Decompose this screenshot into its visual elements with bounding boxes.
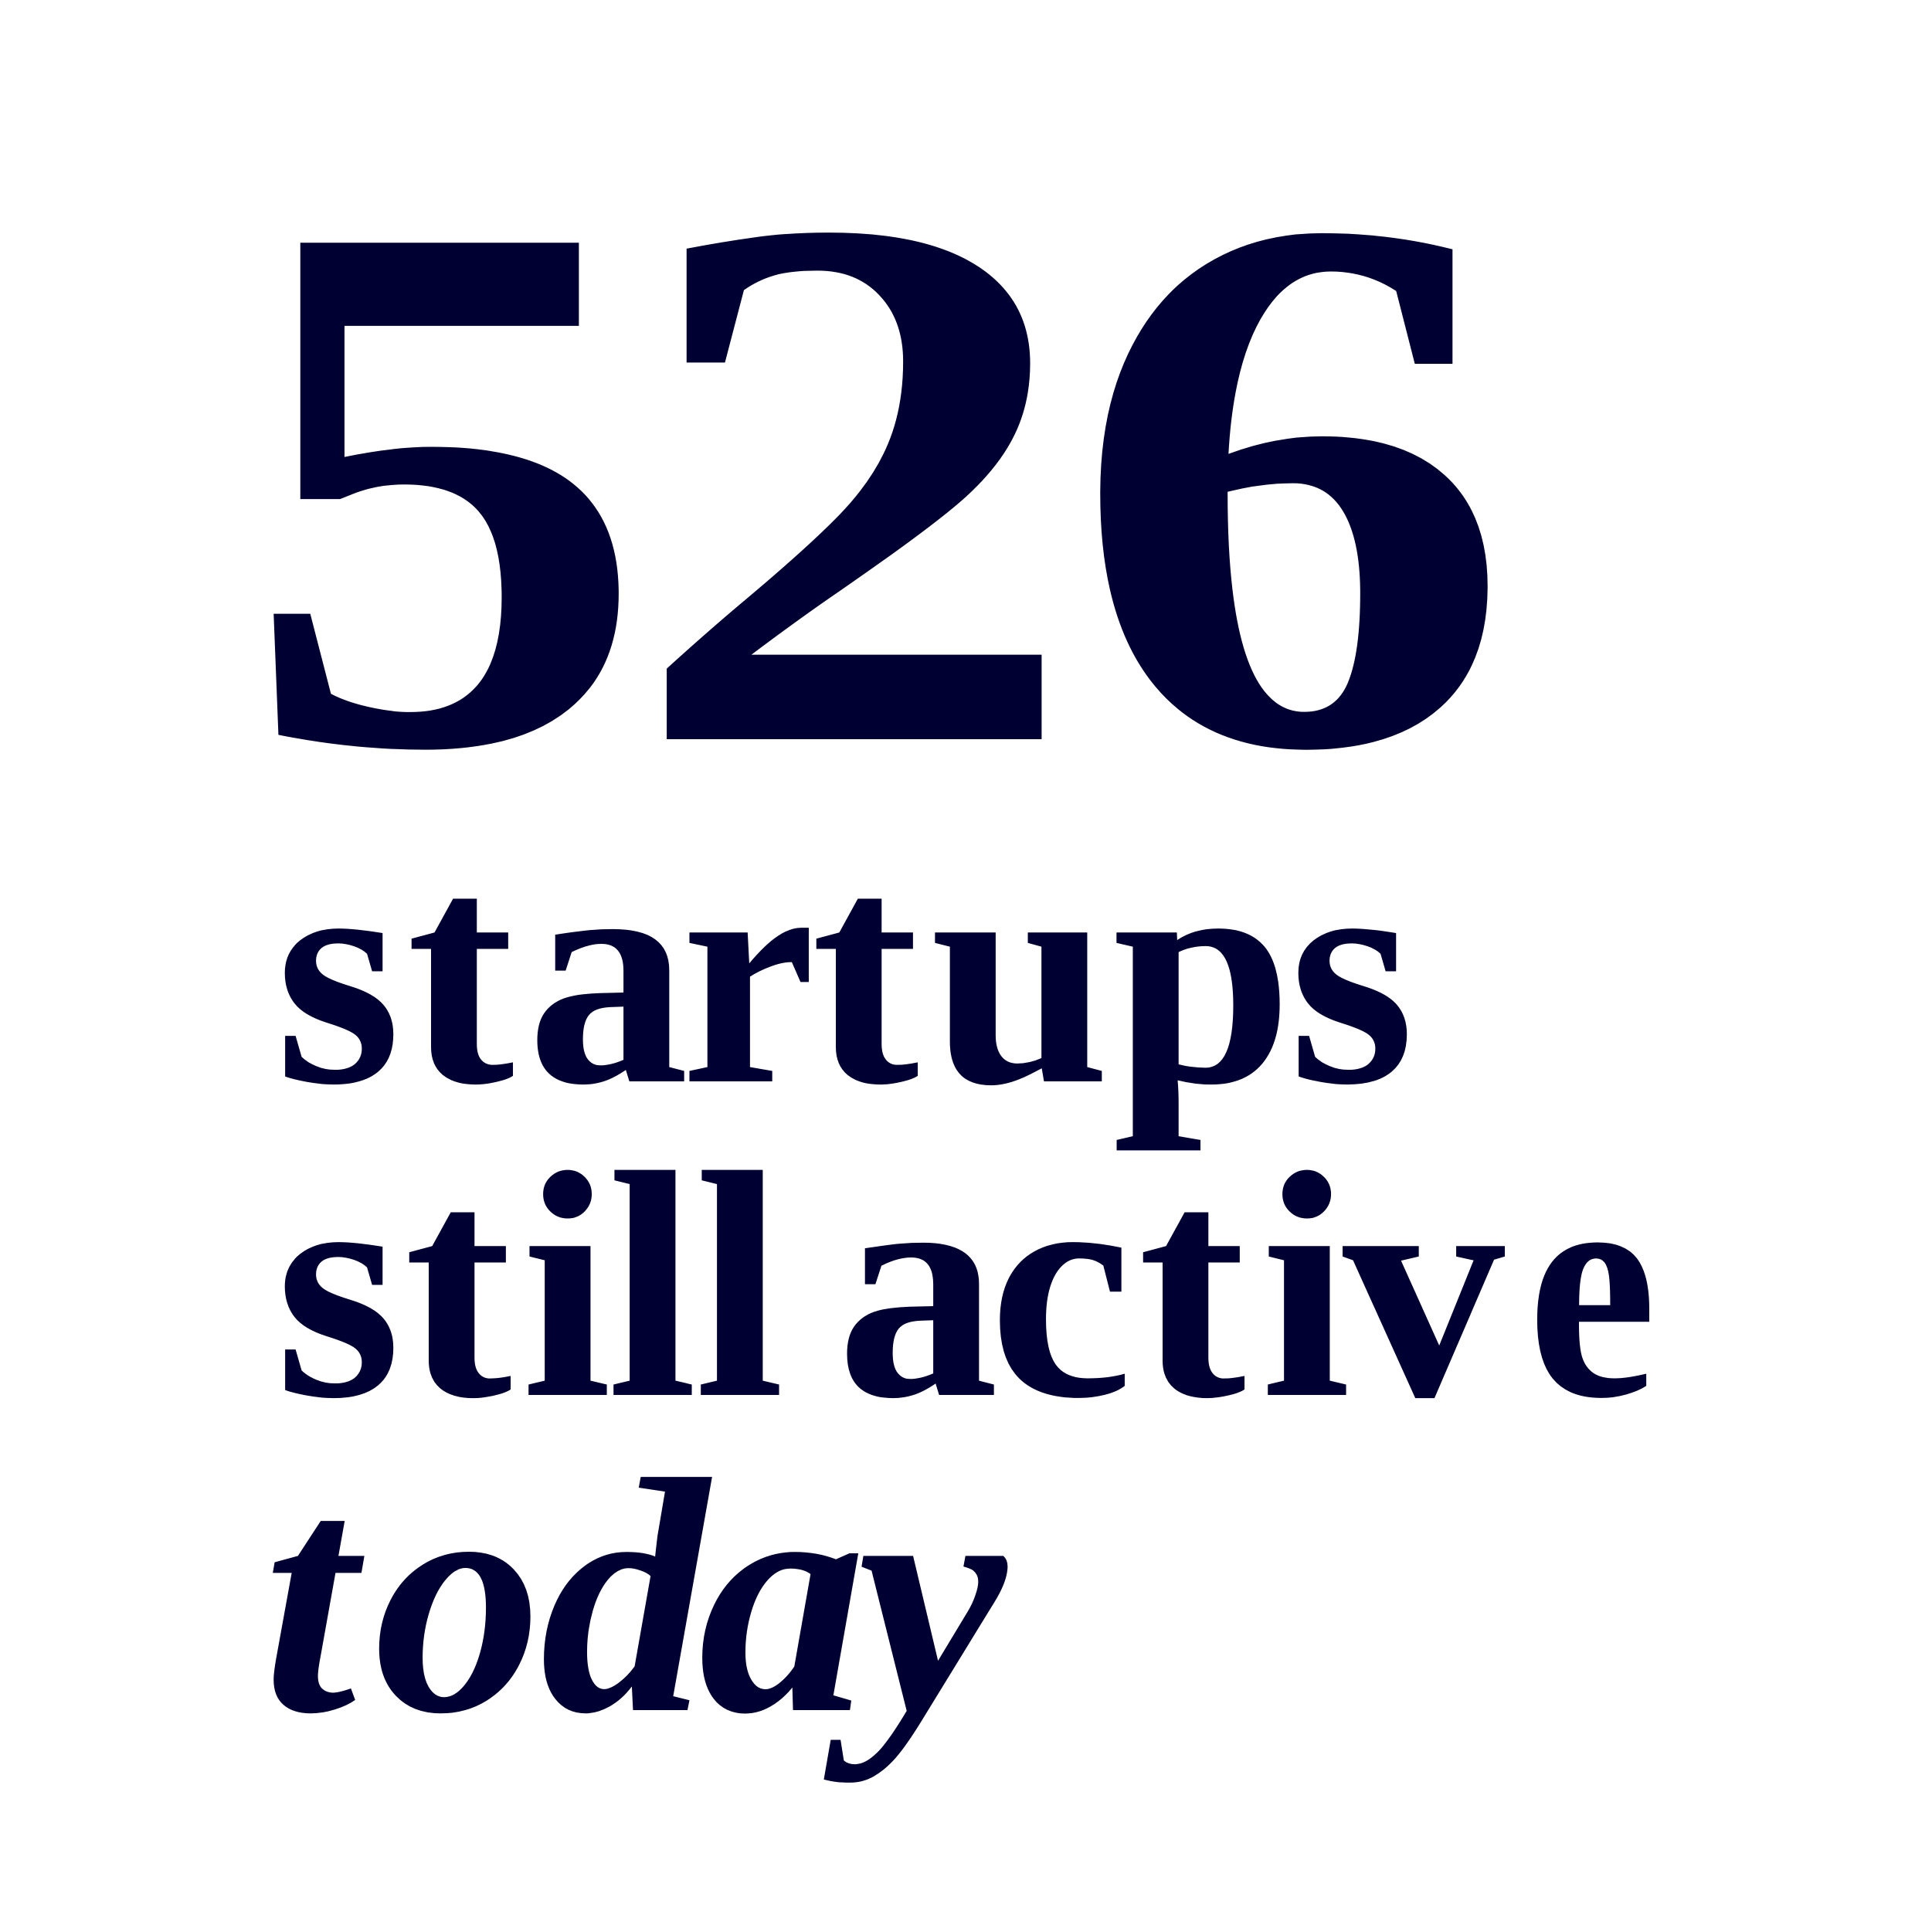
- caption line: still active: still activ: [275, 1106, 1505, 1465]
- caption line: startups: [275, 792, 1414, 1152]
- caption line: startups: tups: [811, 792, 1414, 1152]
- headline number: 526: 6: [1070, 57, 1513, 909]
- headline number: 526: [241, 57, 1513, 909]
- caption line: startups: r: [681, 792, 815, 1152]
- caption line: today in italics: today: [263, 1411, 1010, 1783]
- caption line: still active: e: [1527, 1107, 1657, 1465]
- caption line: startups: sta: [275, 792, 689, 1152]
- headline number: 526: 2: [629, 58, 1081, 905]
- headline number: 526: 5: [241, 63, 649, 908]
